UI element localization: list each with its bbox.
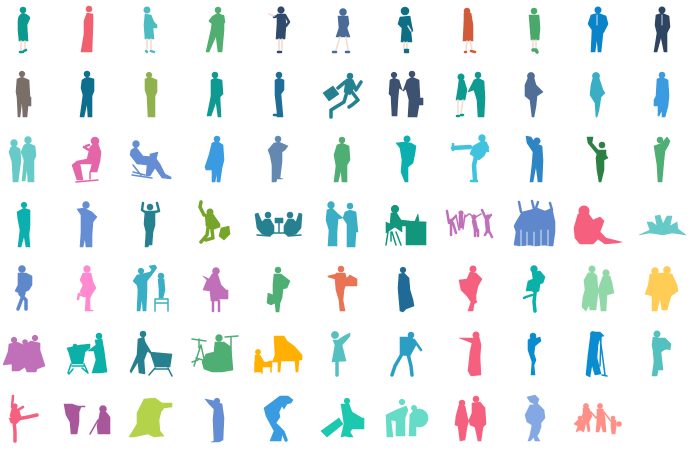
woman sitting coral [574,206,622,244]
man with tripod camera [586,331,607,377]
jumping man green with bag [200,202,230,242]
man with luggage [321,398,364,437]
group women mauve [3,335,45,372]
silhouette woman with bag [525,72,543,117]
man slate on phone [268,136,288,182]
photographer blue [526,136,543,182]
man blue suit [588,7,608,52]
man petrol arms raised [142,203,159,247]
woman aqua suit [144,7,157,52]
crowd cheering [514,201,555,247]
two photographers purple [64,404,110,434]
man teal with phone [396,136,416,182]
trio yellow [645,266,678,311]
woman pushing full cart [67,333,107,374]
man blue holding coat [205,136,224,182]
boys with drum and case [386,399,428,437]
woman coral gown [81,6,93,52]
woman slate dress [333,8,350,52]
reclining couple aqua [639,215,686,235]
woman navy pointing [269,7,289,52]
karate kick [453,135,489,181]
woman green holding trophy [587,137,608,182]
ballerina [9,396,37,441]
woman with shopping bags [203,268,228,311]
two businessmen handshake [389,71,423,117]
man and girl on stool [133,265,168,311]
woman flute coral [459,332,481,376]
woman green trousers [206,7,224,52]
woman orange with bag [328,266,357,311]
two men handshake aqua [326,202,358,247]
pianist yellow [255,336,302,373]
woman pink on office chair [72,137,101,182]
woman petrol hat coat [398,7,413,52]
singer blue [528,333,541,375]
man teal standing [17,202,30,247]
couple holding hands [455,396,486,441]
man dark blue with suitcase [398,267,414,312]
kneeling photographers lime [129,398,172,437]
man green standing [334,137,350,182]
running businessman with case [323,73,361,117]
woman teal with boxes [524,266,545,311]
woman teal arms crossed [18,7,30,52]
man blue profile [274,72,284,117]
girl pink one leg raised [78,266,96,311]
man olive [145,72,157,117]
pair talking aqua [9,137,36,182]
man periwinkle hand to head [77,202,97,247]
woman green skirt suit [529,8,540,52]
man playing violin [392,332,421,375]
woman green with bag [267,267,290,312]
woman with hat periwinkle [525,395,545,441]
two egg chairs with table [255,212,302,236]
person at desk [386,205,427,245]
crouching photographer [264,396,293,441]
four dancers [447,210,492,237]
drummer green [192,335,238,372]
man teal [207,72,223,117]
silhouette woman aqua [590,72,605,117]
photographer periwinkle standing [205,398,224,442]
couple mint shopping [582,266,614,311]
man in lounge chair with laptop [130,141,171,179]
man pushing cart [130,331,172,376]
boy with backpack [15,266,32,309]
woman violin aqua [331,331,350,375]
woman green photographer [654,137,670,182]
man taupe with bag [16,71,31,117]
woman coral with bags pose [459,266,482,311]
saxophone player [652,331,671,376]
family holding hands [574,403,622,434]
silhouette man blue [654,72,669,117]
man petrol blue arms crossed [80,71,94,117]
woman rust long hair [463,8,475,52]
man navy suit [654,7,670,52]
woman and man handshake teal [456,72,485,117]
